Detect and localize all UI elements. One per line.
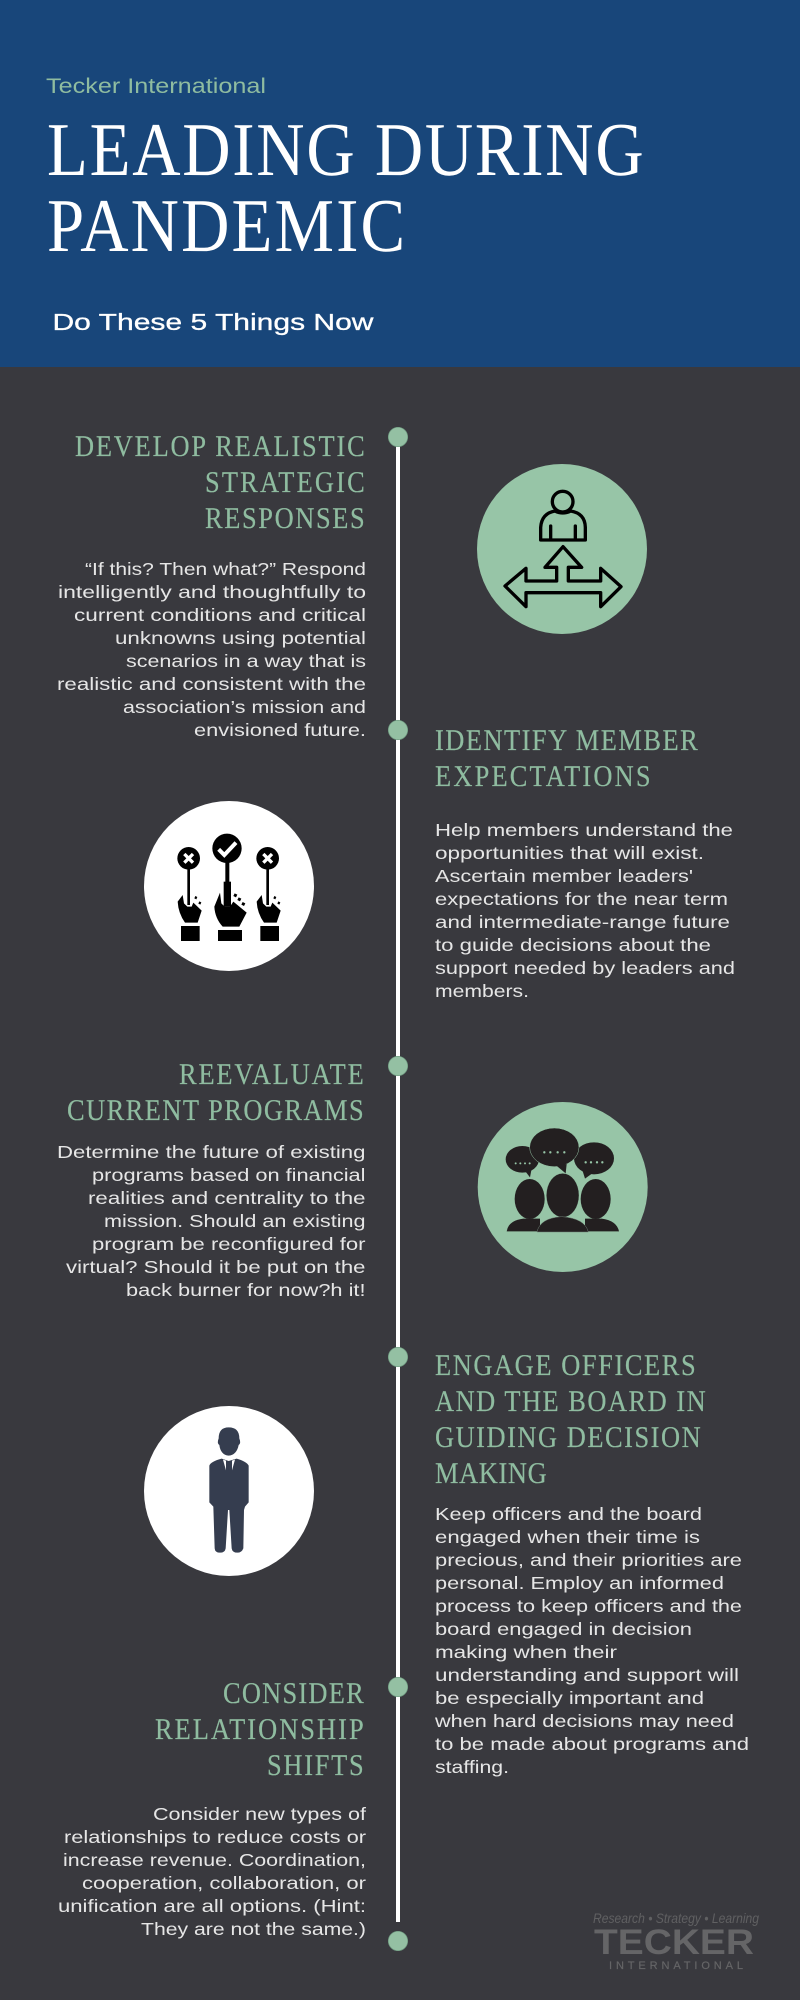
text block: identify member expectations: expectations for the near term (435, 889, 728, 909)
icon: businessman (144, 1406, 314, 1576)
heading: reevaluate current programs: CURRENT PROGRAMS (67, 1094, 364, 1127)
icon: three people talking (478, 1102, 648, 1272)
text block: consider relationship shifts: They are not the same.) (141, 1919, 366, 1939)
text block: identify member expectations (435, 820, 735, 1001)
heading: consider relationship shifts: SHIFTS (267, 1749, 364, 1782)
text block: consider relationship shifts: cooperation, collaboration, or (82, 1873, 366, 1893)
heading: engage officers and the board: AND THE BOARD IN (435, 1385, 706, 1418)
panel: identify member expectations (144, 724, 735, 1001)
heading: identify member expectations (435, 724, 698, 793)
logo: Tecker International: INTERNATIONAL (609, 1960, 743, 1972)
text block: engage officers and the board: be especially important and (435, 1688, 704, 1708)
text block: identify member expectations: Ascertain member leaders' (435, 866, 693, 886)
text block: engage officers and the board: understanding and support will (435, 1665, 739, 1685)
text block: engage officers and the board: staffing. (435, 1757, 509, 1777)
icon: hands voting with signs (144, 801, 314, 971)
heading: develop realistic strategic responses (75, 430, 365, 535)
heading: develop realistic strategic responses: STRATEGIC (205, 466, 365, 499)
text block: engage officers and the board (434, 1504, 749, 1777)
heading: engage officers and the board: GUIDING DECISION (435, 1421, 701, 1454)
text block: engage officers and the board: engaged when their time is (435, 1527, 700, 1547)
text block: engage officers and the board: to be made about programs and (435, 1734, 749, 1754)
heading: engage officers and the board (435, 1349, 706, 1490)
logo: Tecker International: Research • Strategy • Learning (593, 1910, 759, 1926)
header banner (0, 0, 800, 367)
timeline (388, 427, 408, 1951)
text block: reevaluate current programs: programs based on financial (92, 1165, 366, 1185)
text block: engage officers and the board: when hard decisions may need (434, 1711, 734, 1731)
text block: develop realistic strategic responses (57, 559, 366, 740)
text block: reevaluate current programs (57, 1142, 366, 1300)
text block: develop realistic strategic responses: current conditions and critical (74, 605, 366, 625)
heading: develop realistic strategic responses: DEVELOP REALISTIC (75, 430, 365, 463)
heading: engage officers and the board: ENGAGE OFFICERS (435, 1349, 696, 1382)
text block: engage officers and the board: Keep officers and the board (435, 1504, 702, 1524)
heading: engage officers and the board: MAKING (435, 1457, 547, 1490)
panel: engage officers and the board (144, 1349, 749, 1777)
title (47, 108, 644, 268)
text block: reevaluate current programs: realities and centrality to the (88, 1188, 366, 1208)
text block: identify member expectations: opportunities that will exist. (435, 843, 704, 863)
text block: reevaluate current programs: program be reconfigured for (92, 1234, 366, 1254)
heading: identify member expectations: EXPECTATIONS (435, 760, 651, 793)
text block: consider relationship shifts: increase revenue. Coordination, (63, 1850, 366, 1870)
text block: develop realistic strategic responses: scenarios in a way that is (126, 651, 366, 671)
heading: reevaluate current programs (67, 1058, 364, 1127)
heading: consider relationship shifts: RELATIONSHIP (155, 1713, 364, 1746)
text block: engage officers and the board: board engaged in decision (435, 1619, 692, 1639)
text block: engage officers and the board: making when their (435, 1642, 617, 1662)
text block: engage officers and the board: personal. Employ an informed (435, 1573, 724, 1593)
icon: person with diverging arrows (477, 464, 647, 634)
text block: reevaluate current programs: back burner for now?h it! (126, 1280, 366, 1300)
text block: consider relationship shifts: unification are all options. (Hint: (58, 1896, 366, 1916)
text block: develop realistic strategic responses: “If this? Then what?” Respond (85, 559, 366, 579)
logo: Tecker International: TECKER (594, 1923, 754, 1962)
text block: develop realistic strategic responses: intelligently and thoughtfully to (58, 582, 366, 602)
heading: consider relationship shifts: CONSIDER (223, 1677, 364, 1710)
text block: identify member expectations: members. (435, 981, 529, 1001)
panel: consider relationship shifts (58, 1677, 366, 1939)
text block: consider relationship shifts (58, 1804, 366, 1939)
heading: consider relationship shifts (155, 1677, 364, 1782)
panel: reevaluate current programs (57, 1058, 648, 1300)
text block: engage officers and the board: precious, and their priorities are (435, 1550, 742, 1570)
text block: consider relationship shifts: Consider new types of (153, 1804, 366, 1824)
text block: reevaluate current programs: Determine the future of existing (57, 1142, 366, 1162)
subtitle: Do These 5 Things Now (52, 309, 375, 335)
text block: engage officers and the board: process to keep officers and the (435, 1596, 742, 1616)
text block: develop realistic strategic responses: association’s mission and (123, 697, 366, 717)
text block: identify member expectations: Help members understand the (435, 820, 733, 840)
text block: consider relationship shifts: relationships to reduce costs or (64, 1827, 366, 1847)
text block: identify member expectations: and intermediate-range future (435, 912, 730, 932)
text block: develop realistic strategic responses: unknowns using potential (115, 628, 366, 648)
panel: develop realistic strategic responses (57, 430, 647, 740)
heading: identify member expectations: IDENTIFY MEMBER (435, 724, 698, 757)
heading: develop realistic strategic responses: RESPONSES (205, 502, 365, 535)
heading: reevaluate current programs: REEVALUATE (179, 1058, 364, 1091)
organisation name: Tecker International (46, 75, 266, 98)
text block: identify member expectations: support needed by leaders and (435, 958, 735, 978)
logo: Tecker International (593, 1910, 759, 1972)
text block: reevaluate current programs: virtual? Should it be put on the (66, 1257, 366, 1277)
text block: reevaluate current programs: mission. Should an existing (104, 1211, 366, 1231)
title: LEADING DURING (47, 108, 644, 192)
text block: develop realistic strategic responses: envisioned future. (194, 720, 366, 740)
title: PANDEMIC (47, 184, 405, 268)
text block: identify member expectations: to guide decisions about the (435, 935, 711, 955)
text block: develop realistic strategic responses: realistic and consistent with the (57, 674, 366, 694)
